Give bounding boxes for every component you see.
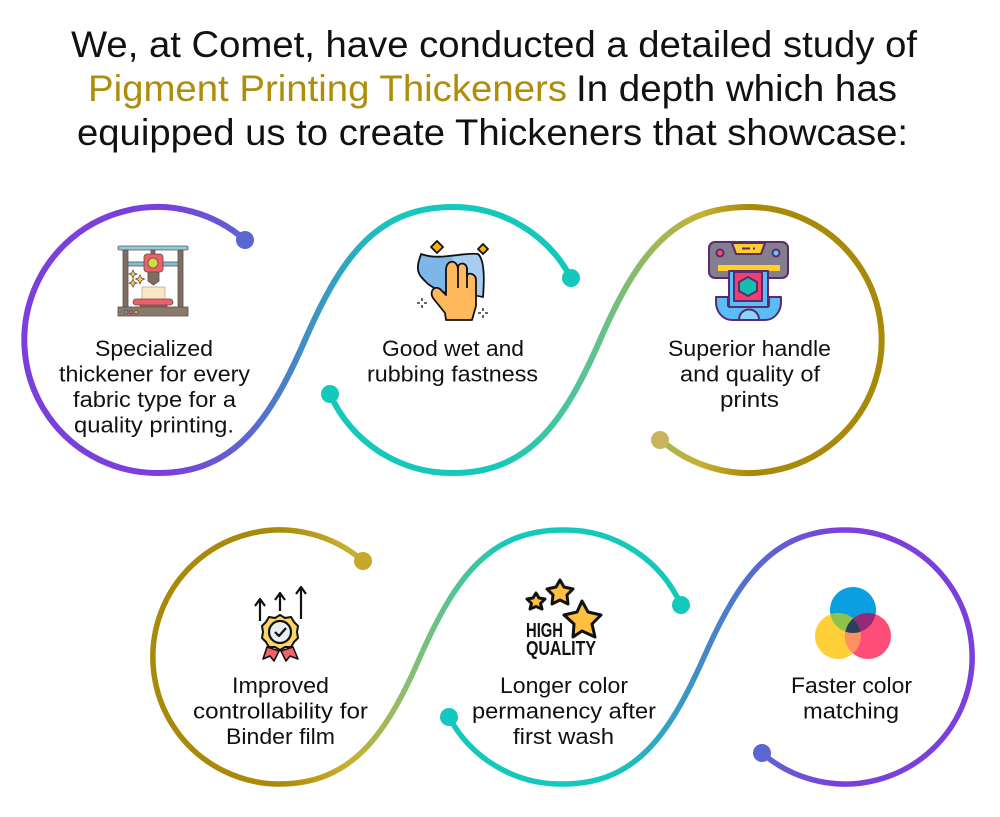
- text: specialized thickener: fabric type for a: [73, 387, 237, 412]
- text: superior handle: and quality of: [680, 362, 821, 386]
- text: faster colour matching: [791, 673, 913, 724]
- text: colour permanency: [472, 673, 657, 749]
- title: [71, 24, 918, 153]
- text: wet and rubbing fastness: [367, 336, 538, 386]
- title: equipped us to create Thickeners that showcase:: [77, 112, 908, 153]
- icon: overlapping colour circles: [815, 587, 891, 659]
- icon: high quality stars: [526, 580, 601, 660]
- icon: printer: [709, 242, 788, 320]
- text: specialized thickener: quality printing.: [74, 412, 234, 438]
- icon: high quality stars: HIGH: [526, 620, 563, 642]
- text: faster colour matching: Faster color: [791, 673, 913, 698]
- icon: 3D printer: [118, 246, 188, 316]
- title: In depth which has: [576, 68, 897, 109]
- connector: teal to purple curve, bottom row: [440, 530, 972, 784]
- connector: purple to teal curve, top row: [24, 207, 580, 473]
- text: colour permanency: first wash: [513, 724, 614, 749]
- icon: award badge with arrows: [255, 587, 306, 661]
- icon: hand wiping with cloth: [417, 241, 488, 320]
- icon: high quality stars: QUALITY: [526, 638, 597, 660]
- text: colour permanency: Longer color: [500, 673, 629, 698]
- text: specialized thickener: thickener for every: [59, 362, 251, 386]
- text: faster colour matching: matching: [803, 698, 899, 724]
- text: binder film: controllability for: [193, 698, 369, 724]
- text: specialized thickener: [59, 336, 251, 438]
- connector: gold to teal curve, bottom row: [153, 530, 690, 784]
- text: binder film: [193, 673, 369, 749]
- connector: teal to gold curve, top row: [321, 207, 882, 473]
- title: We, at Comet, have conducted a detailed study of: [71, 24, 918, 65]
- text: binder film: Improved: [232, 673, 329, 698]
- text: wet and rubbing fastness: rubbing fastness: [367, 362, 538, 386]
- text: binder film: Binder film: [226, 724, 335, 749]
- text: colour permanency: permanency after: [472, 698, 657, 724]
- text: superior handle: prints: [720, 387, 779, 412]
- title: Pigment Printing Thickeners: [88, 68, 567, 109]
- text: specialized thickener: Specialized: [95, 336, 213, 361]
- text: wet and rubbing fastness: Good wet and: [382, 336, 524, 361]
- text: superior handle: [668, 336, 831, 412]
- text: superior handle: Superior handle: [668, 336, 831, 361]
